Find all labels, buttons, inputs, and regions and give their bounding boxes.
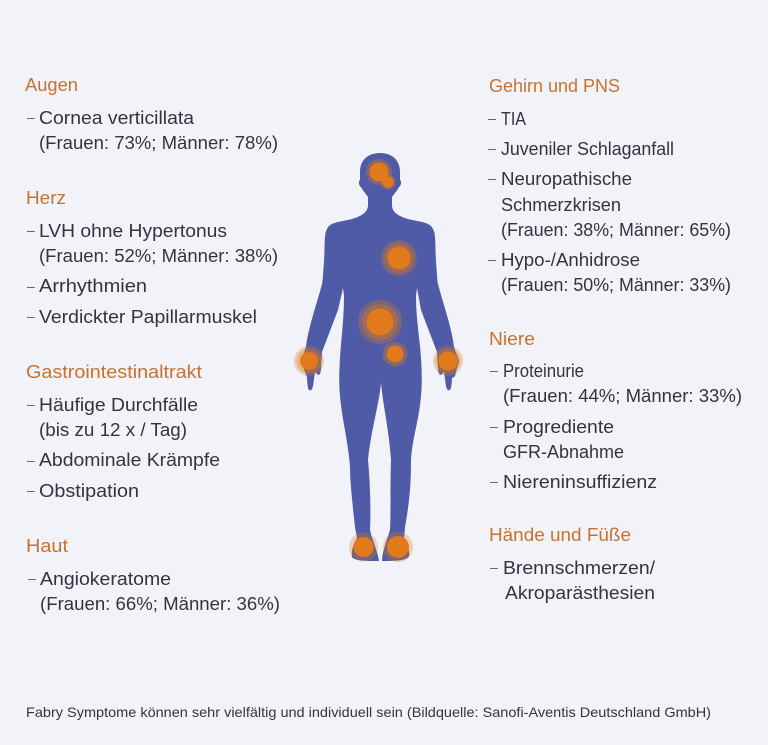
panel: Gehirn und PNS: [488, 75, 731, 295]
list item: Brennschmerzen/Akroparästhesien: –: [490, 559, 498, 575]
list item: TIA: TIA: [501, 108, 527, 129]
list item: Hypo-/Anhidrose: [488, 249, 731, 295]
list item: Obstipation: –: [27, 482, 35, 498]
list item: LVH ohne Hypertonus: (Frauen: 52%; Männer: 38%): [39, 245, 278, 266]
heading: Herz: Herz: [26, 187, 66, 208]
list item: Neuropathische Schmerzkrisen: –: [488, 170, 496, 186]
list item: Juveniler Schlaganfall: Juveniler Schlaganfall: [501, 138, 674, 159]
heading: Niere: Niere: [489, 328, 535, 349]
list item: Hypo-/Anhidrose: Hypo-/Anhidrose: [501, 249, 640, 270]
symptom marker: left hand: [294, 346, 324, 376]
symptom marker: right foot: [383, 532, 413, 562]
symptom marker: right hand: [433, 346, 463, 376]
list item: Brennschmerzen/Akroparästhesien: Akroparästhesien: [505, 582, 655, 603]
list item: Proteinurie: [490, 360, 742, 406]
list item: Niereninsuffizienz: –: [490, 473, 498, 489]
body figure: [294, 153, 463, 562]
list item: Proteinurie: Proteinurie: [503, 360, 584, 381]
list item: Brennschmerzen/Akroparästhesien: Brennschmerzen/: [503, 557, 656, 578]
list item: Verdickter Papillarmuskel: –: [27, 308, 35, 324]
list item: LVH ohne Hypertonus: LVH ohne Hypertonus: [39, 220, 227, 241]
symptom marker: stomach: [358, 300, 402, 344]
list item: Progrediente GFR-Abnahme: GFR-Abnahme: [503, 441, 624, 462]
symptom marker: heart: [381, 240, 417, 276]
silhouette: [301, 153, 459, 561]
list item: Neuropathische Schmerzkrisen: [488, 168, 731, 240]
list item: Progrediente GFR-Abnahme: –: [490, 418, 498, 434]
symptom marker: eye: [380, 174, 396, 190]
list item: Angiokeratome: (Frauen: 66%; Männer: 36%): [40, 593, 280, 614]
caption: Fabry Symptome können sehr vielfältig und individuell sein (Bildquelle: Sanofi-Aventis Deutschland GmbH): [26, 704, 711, 720]
list item: Abdominale Krämpfe: Abdominale Krämpfe: [39, 449, 220, 470]
list item: Cornea verticillata: –: [27, 109, 35, 125]
symptom marker: kidney: [382, 342, 408, 366]
list item: Obstipation: Obstipation: [39, 480, 139, 501]
list item: Angiokeratome: [28, 568, 280, 614]
list item: Hypo-/Anhidrose: –: [488, 251, 496, 267]
list item: Proteinurie: (Frauen: 44%; Männer: 33%): [503, 385, 742, 406]
list item: Häufige Durchfälle: –: [27, 396, 35, 412]
heading: Hände und Füße: Hände und Füße: [489, 524, 631, 545]
list item: Cornea verticillata: Cornea verticillata: [39, 107, 195, 128]
list item: Hypo-/Anhidrose: (Frauen: 50%; Männer: 33%): [501, 274, 731, 295]
list item: Progrediente GFR-Abnahme: Progrediente: [503, 416, 614, 437]
panel: Haut: [26, 535, 280, 614]
heading: Augen: Augen: [25, 74, 78, 95]
list item: Arrhythmien: Arrhythmien: [39, 275, 147, 296]
list item: Brennschmerzen/Akroparästhesien: [490, 557, 656, 603]
list item: Cornea verticillata: [27, 107, 278, 153]
list item: Angiokeratome: –: [28, 570, 36, 586]
list item: Angiokeratome: Angiokeratome: [40, 568, 171, 589]
list item: Proteinurie: –: [490, 362, 498, 378]
list item: Niereninsuffizienz: Niereninsuffizienz: [503, 471, 657, 492]
list item: Häufige Durchfälle: Häufige Durchfälle: [39, 394, 198, 415]
list item: TIA: [488, 108, 527, 129]
heading: Gehirn und PNS: Gehirn und PNS: [489, 75, 620, 96]
panel: Hände und Füße: [489, 524, 656, 603]
symptom marker: brain: [366, 159, 392, 185]
panel: Augen: [25, 74, 278, 153]
panel: Herz: [26, 187, 278, 327]
list item: Häufige Durchfälle: (bis zu 12 x / Tag): [39, 419, 187, 440]
list item: LVH ohne Hypertonus: –: [27, 222, 35, 238]
heading: Gastrointestinaltrakt: Gastrointestinaltrakt: [26, 361, 202, 382]
panel: Gastrointestinaltrakt: [26, 361, 220, 501]
list item: Progrediente GFR-Abnahme: [490, 416, 624, 462]
list item: Juveniler Schlaganfall: –: [488, 140, 496, 156]
list item: Neuropathische Schmerzkrisen: Neuropathische: [501, 168, 632, 189]
list item: Häufige Durchfälle: [27, 394, 198, 440]
list item: LVH ohne Hypertonus: [27, 220, 278, 266]
list item: TIA: –: [488, 110, 496, 126]
heading: Haut: Haut: [26, 535, 68, 556]
list item: Cornea verticillata: (Frauen: 73%; Männer: 78%): [39, 132, 278, 153]
list item: Neuropathische Schmerzkrisen: Schmerzkrisen: [501, 194, 621, 215]
list item: Neuropathische Schmerzkrisen: (Frauen: 38%; Männer: 65%): [501, 219, 731, 240]
list item: Arrhythmien: –: [27, 278, 35, 294]
panel: Niere: [489, 328, 742, 492]
list item: Abdominale Krämpfe: –: [27, 452, 35, 468]
list item: Verdickter Papillarmuskel: Verdickter Papillarmuskel: [39, 306, 257, 327]
symptom marker: left foot: [349, 532, 378, 562]
